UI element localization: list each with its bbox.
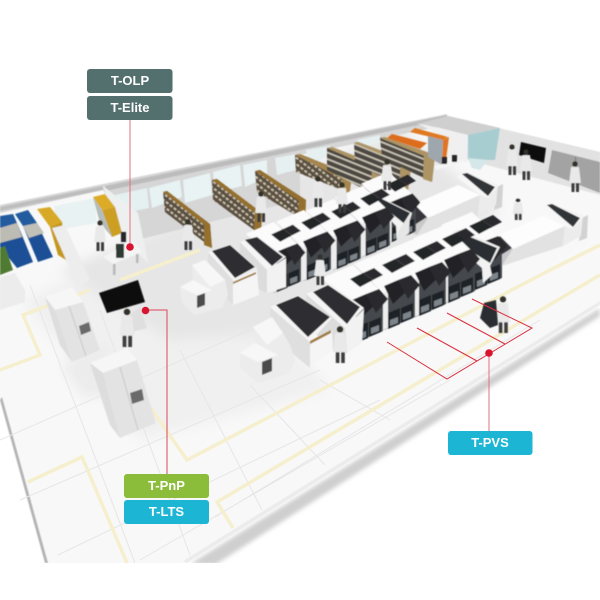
front row machines [240, 203, 588, 383]
left cabinets: blue, green, yellow [0, 207, 90, 310]
storage cabinets [45, 287, 156, 438]
shelves with materials, far side [327, 134, 435, 198]
desk with computer [103, 232, 142, 275]
callout: T-OLP and T-Elite: T-Elite [110, 100, 150, 115]
cart [480, 300, 498, 328]
orange cabinets [410, 128, 449, 165]
back wall with windows [0, 114, 447, 240]
callout: T-OLP and T-Elite: T-OLP [111, 73, 149, 88]
callout: T-PnP and T-LTS: T-LTS [149, 504, 184, 519]
partition with yellow cabinet [93, 186, 148, 263]
workers [94, 144, 581, 363]
desk at far wall [434, 155, 462, 170]
callout: T-PnP and T-LTS: T-PnP [148, 478, 185, 493]
factory floor [0, 115, 600, 565]
shelves with materials, window side [163, 154, 352, 248]
right wall, glass room and door [417, 116, 600, 195]
callout: T-PVS: T-PVS [471, 435, 509, 450]
floor grid lines [0, 285, 540, 563]
wall monitor [519, 142, 546, 163]
yellow floor lines [0, 245, 600, 563]
callout: T-PVS [448, 349, 532, 455]
kiosk screen with stand [99, 280, 147, 332]
back row machines [180, 172, 503, 315]
callout: T-PnP and T-LTS [124, 307, 209, 524]
PVS red floor zone [387, 299, 532, 379]
callout: T-OLP and T-Elite [87, 69, 172, 251]
